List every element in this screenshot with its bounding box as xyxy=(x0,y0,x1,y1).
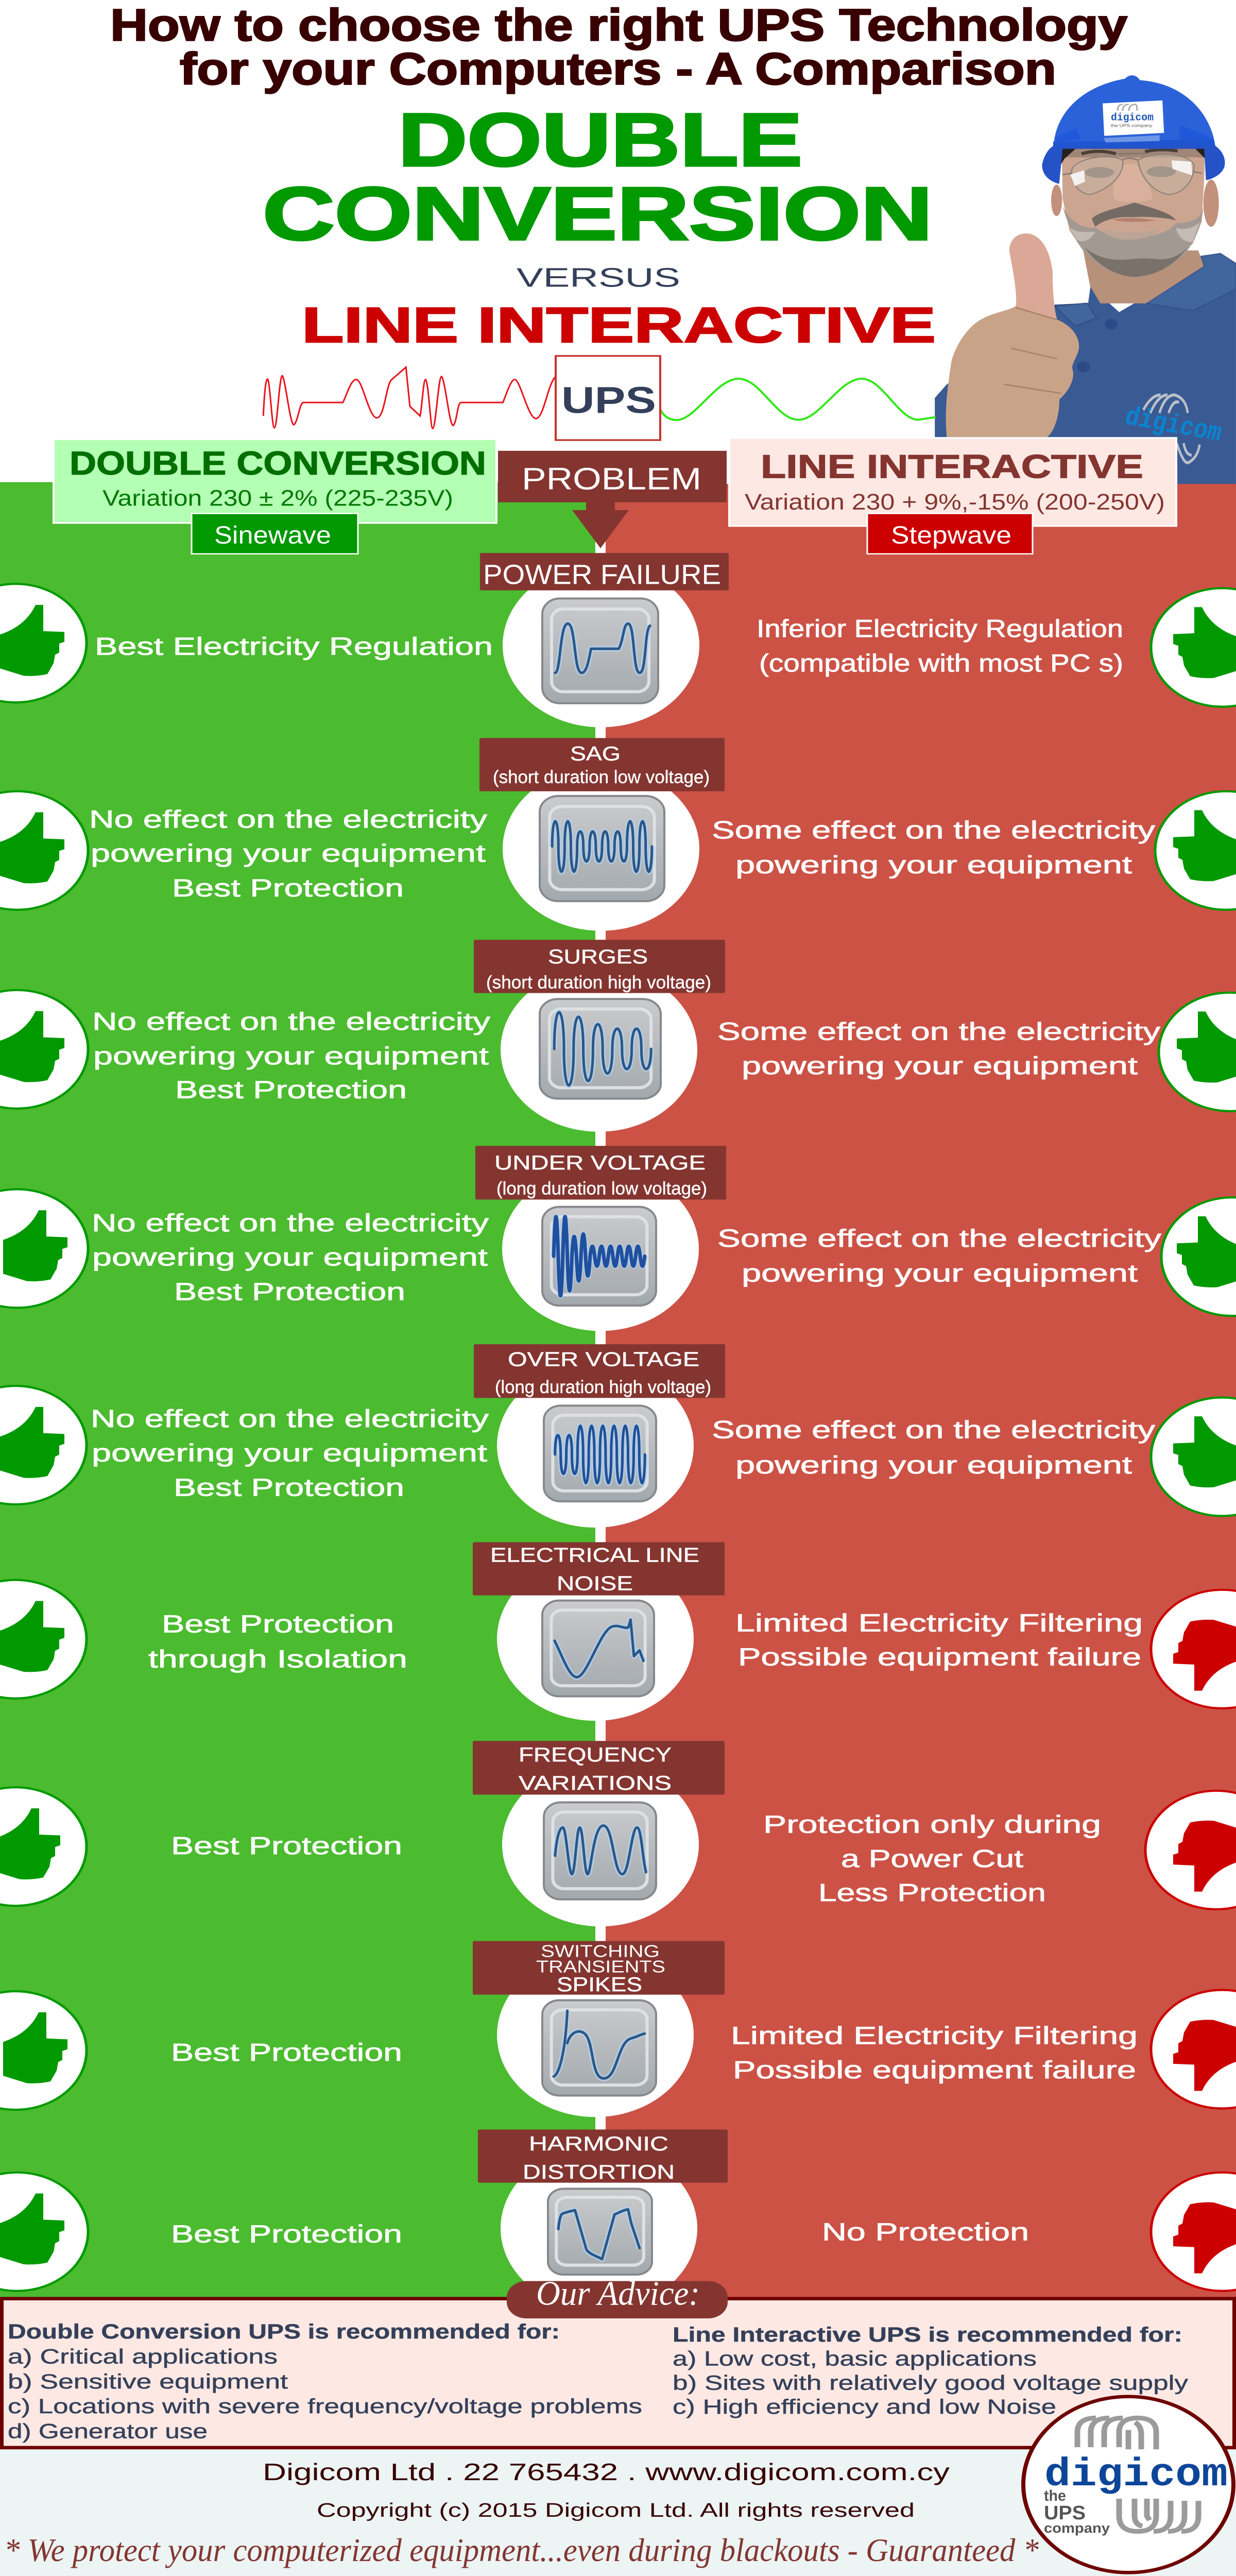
title: for your Computers - A Comparison xyxy=(180,44,1056,94)
logo tagline: company xyxy=(1044,2520,1110,2536)
label: sag xyxy=(479,738,725,791)
panel: red background xyxy=(606,484,1236,2298)
diagram: dirty power through UPS to clean sinewave xyxy=(263,356,936,440)
panel: double conversion header xyxy=(54,439,496,554)
title: How to choose the right UPS Technology xyxy=(110,0,1127,50)
label: sag: SAG xyxy=(570,742,621,765)
logo: digicom the UPS company xyxy=(1023,2397,1233,2572)
text: line interactive result xyxy=(717,1225,1161,1287)
icon: thumbs up right xyxy=(1161,1197,1236,1316)
icon: thumbs down right xyxy=(1151,2173,1236,2291)
center circle xyxy=(502,1762,699,1926)
photo: man in hard hat giving thumbs up: digicom xyxy=(1111,112,1154,124)
text: line interactive result: powering your equipment xyxy=(735,1451,1132,1479)
badge: sinewave xyxy=(192,514,358,554)
icon: thumbs up right xyxy=(1159,993,1236,1111)
text: double conversion result: Best Protection xyxy=(171,2221,402,2248)
icon: thumbs up left xyxy=(0,1386,87,1504)
text: line interactive result: Possible equipment failure xyxy=(738,1643,1141,1671)
problem heading xyxy=(498,451,727,502)
text: line interactive recommendations: b) Sites with relatively good voltage supply xyxy=(673,2371,1188,2394)
text: double conversion recommendations: Double Conversion UPS is recommended for: xyxy=(8,2320,560,2343)
text: contact line: Digicom Ltd . 22 765432 . www.digicom.com.cy xyxy=(263,2459,950,2485)
label: over voltage xyxy=(474,1344,725,1398)
label: harmonic distortion xyxy=(478,2129,728,2183)
label: surges: (short duration high voltage) xyxy=(486,973,711,992)
row: surges xyxy=(0,940,1236,1132)
center circle xyxy=(497,1953,694,2117)
text: line interactive result: powering your equipment xyxy=(742,1052,1138,1080)
text: double conversion recommendations: d) Generator use xyxy=(8,2420,208,2443)
text: double conversion result: powering your equipment xyxy=(93,1042,489,1070)
panel: line interactive header: Variation 230 + 9%,-15% (200-250V) xyxy=(745,490,1165,515)
photo: man in hard hat giving thumbs up xyxy=(935,75,1236,485)
text: line interactive result: (compatible with most PC s) xyxy=(759,650,1123,677)
label: electrical line noise: ELECTRICAL LINE xyxy=(490,1544,699,1567)
heading: line interactive: LINE INTERACTIVE xyxy=(302,297,936,353)
text: line interactive recommendations xyxy=(673,2324,1188,2418)
label: under voltage: (long duration low voltage) xyxy=(496,1179,707,1198)
text: double conversion result: Best Protection xyxy=(174,1278,405,1306)
label: harmonic distortion: DISTORTION xyxy=(523,2161,675,2183)
text: line interactive result xyxy=(735,1609,1143,1671)
text: double conversion result: Best Protection xyxy=(175,1076,407,1104)
text: line interactive result xyxy=(712,817,1155,879)
label: under voltage: UNDER VOLTAGE xyxy=(494,1152,706,1174)
text: double conversion result: Best Electricity Regulation xyxy=(95,633,493,660)
text: line interactive result: Some effect on the electricity xyxy=(712,817,1155,844)
arrow: problem down xyxy=(572,501,629,548)
text: double conversion result xyxy=(91,1405,489,1501)
text: line interactive result xyxy=(757,615,1123,677)
text: copyright: Copyright (c) 2015 Digicom Ltd. All rights reserved xyxy=(317,2499,915,2521)
label: surges: SURGES xyxy=(548,946,648,968)
text: double conversion result: No effect on the electricity xyxy=(91,1405,489,1433)
text: double conversion result: Best Protection xyxy=(162,1611,394,1638)
text: line interactive result: Protection only during xyxy=(763,1811,1101,1838)
text: line interactive result: powering your equipment xyxy=(742,1260,1138,1287)
label: electrical line noise: NOISE xyxy=(557,1572,633,1595)
panel: green background xyxy=(0,482,595,2298)
badge: stepwave xyxy=(867,514,1033,554)
panel: line interactive header: LINE INTERACTIVE xyxy=(761,448,1143,485)
heading: versus: VERSUS xyxy=(517,263,680,293)
icon: sag waveform xyxy=(540,796,664,901)
text: line interactive result xyxy=(731,2022,1138,2084)
label: harmonic distortion: HARMONIC xyxy=(529,2133,668,2155)
text: line interactive result: Possible equipment failure xyxy=(733,2057,1136,2084)
icon: thumbs up left xyxy=(0,1787,87,1906)
center connector line xyxy=(595,537,606,2284)
heading: double conversion: DOUBLE xyxy=(398,98,802,182)
label: switching transients spikes: TRANSIENTS xyxy=(536,1957,665,1976)
row: over voltage xyxy=(0,1344,1236,1528)
text: double conversion result xyxy=(92,1008,490,1104)
heading: double conversion xyxy=(263,98,933,256)
icon: thumbs up left xyxy=(0,2173,88,2291)
text: line interactive result: Inferior Electricity Regulation xyxy=(757,615,1123,643)
icon: thumbs down right xyxy=(1145,1791,1236,1909)
UPS box: UPS xyxy=(561,379,656,421)
text: double conversion result: powering your equipment xyxy=(92,1244,488,1272)
row: under voltage xyxy=(0,1146,1236,1331)
text: double conversion recommendations xyxy=(8,2320,642,2443)
label: surges xyxy=(474,940,725,993)
UPS box xyxy=(556,356,660,440)
text: line interactive result: powering your equipment xyxy=(735,851,1132,879)
text: double conversion result: No effect on the electricity xyxy=(92,1209,489,1237)
panel: footer background xyxy=(0,2449,1236,2576)
center circle xyxy=(501,968,697,1132)
label: switching transients spikes: SPIKES xyxy=(557,1974,642,1996)
logo arches bottom xyxy=(1119,2499,1198,2531)
logo tagline xyxy=(1044,2487,1110,2536)
panel: advice xyxy=(2,2299,1234,2448)
title xyxy=(110,0,1127,94)
icon: power failure waveform xyxy=(542,599,658,703)
problem heading: PROBLEM xyxy=(522,462,701,497)
icon: over voltage waveform xyxy=(544,1405,656,1501)
text: line interactive result xyxy=(763,1811,1101,1907)
center circle xyxy=(497,1364,694,1528)
label: switching transients spikes xyxy=(473,1941,725,1996)
row: sag xyxy=(0,738,1236,931)
text: double conversion result: Best Protection xyxy=(171,2039,402,2066)
icon: thumbs up left xyxy=(0,990,88,1109)
logo arches top xyxy=(1077,2418,1156,2449)
icon: thumbs up left xyxy=(0,1991,87,2110)
icon: surges waveform xyxy=(540,999,661,1098)
label: power failure: POWER FAILURE xyxy=(483,560,721,590)
text: line interactive recommendations: c) High efficiency and low Noise xyxy=(673,2396,1056,2418)
panel: double conversion header: DOUBLE CONVERSION xyxy=(70,445,486,482)
text: double conversion result: Best Protection xyxy=(171,1833,402,1860)
badge: stepwave: Stepwave xyxy=(891,521,1011,549)
icon: harmonic distortion waveform xyxy=(548,2189,652,2275)
icon: thumbs up right xyxy=(1155,791,1236,910)
text: line interactive recommendations: a) Low cost, basic applications xyxy=(673,2347,1037,2370)
icon: under voltage waveform xyxy=(542,1207,656,1306)
label: switching transients spikes: SWITCHING xyxy=(541,1941,660,1961)
text: line interactive result: Some effect on the electricity xyxy=(717,1225,1161,1252)
icon: thumbs up left xyxy=(0,791,88,910)
label: sag: (short duration low voltage) xyxy=(493,767,710,787)
text: line interactive result: Some effect on the electricity xyxy=(712,1416,1155,1444)
badge: our advice: Our Advice: xyxy=(536,2274,700,2312)
panel: line interactive header xyxy=(729,438,1176,554)
text: double conversion result xyxy=(92,1209,489,1306)
icon: thumbs down right xyxy=(1151,1590,1236,1708)
icon: thumbs up left xyxy=(0,1189,88,1308)
chart: clean output sinewave xyxy=(661,379,936,420)
heading: double conversion: CONVERSION xyxy=(263,172,933,256)
row: harmonic distortion xyxy=(0,2129,1236,2310)
text: line interactive result: Some effect on the electricity xyxy=(717,1018,1160,1045)
row: power failure xyxy=(0,553,1236,727)
text: line interactive recommendations: Line Interactive UPS is recommended for: xyxy=(673,2324,1182,2346)
center circle xyxy=(502,1167,699,1331)
label: over voltage: OVER VOLTAGE xyxy=(508,1348,699,1371)
icon: thumbs down right xyxy=(1151,1990,1236,2108)
label: over voltage: (long duration high voltage) xyxy=(495,1377,711,1397)
photo: man in hard hat giving thumbs up: the UPS company xyxy=(1111,123,1153,128)
text: double conversion result: powering your equipment xyxy=(91,840,486,867)
icon: thumbs up left xyxy=(0,584,87,702)
icon: line noise waveform xyxy=(542,1601,654,1696)
icon: thumbs up right xyxy=(1151,1397,1236,1516)
icon: thumbs up left xyxy=(0,1580,87,1699)
label: frequency variations xyxy=(473,1741,725,1794)
label: frequency variations: FREQUENCY xyxy=(519,1744,672,1766)
text: line interactive result xyxy=(712,1416,1155,1479)
text: double conversion result: No effect on the electricity xyxy=(92,1008,490,1036)
text: line interactive result: a Power Cut xyxy=(841,1845,1023,1873)
panel: double conversion header: Variation 230 ± 2% (225-235V) xyxy=(102,486,453,511)
label: electrical line noise xyxy=(473,1542,725,1596)
text: double conversion result: Best Protection xyxy=(174,1474,404,1501)
text: line interactive result xyxy=(717,1018,1160,1080)
icon: switching transient waveform xyxy=(542,2000,656,2096)
label: under voltage xyxy=(475,1146,726,1199)
text: line interactive result: No Protection xyxy=(822,2218,1029,2246)
chart: distorted input waveform xyxy=(263,367,556,429)
text: double conversion result xyxy=(148,1611,407,1673)
text: double conversion recommendations: b) Sensitive equipment xyxy=(8,2370,288,2393)
center circle xyxy=(501,2146,697,2310)
text: double conversion result: No effect on the electricity xyxy=(89,806,487,834)
text: double conversion recommendations: c) Locations with severe frequency/voltage problems xyxy=(8,2395,642,2418)
logo tagline: the xyxy=(1044,2487,1066,2504)
center circle xyxy=(503,563,699,727)
text: line interactive result: Limited Electricity Filtering xyxy=(731,2022,1138,2049)
label: frequency variations: VARIATIONS xyxy=(519,1772,672,1794)
text: double conversion result xyxy=(89,806,487,902)
center circle xyxy=(503,767,699,931)
icon: thumbs up right xyxy=(1151,588,1236,707)
text: double conversion result: Best Protection xyxy=(172,874,404,902)
icon: frequency variation waveform xyxy=(544,1802,656,1900)
text: double conversion recommendations: a) Critical applications xyxy=(8,2345,278,2368)
text: line interactive result: Less Protection xyxy=(818,1879,1046,1907)
text: line interactive result: Limited Electricity Filtering xyxy=(735,1609,1143,1637)
row: switching transients spikes xyxy=(0,1941,1236,2117)
badge: sinewave: Sinewave xyxy=(214,521,331,549)
text: double conversion result: through Isolation xyxy=(148,1646,407,1673)
logo tagline: UPS xyxy=(1044,2502,1086,2523)
row: electrical line noise xyxy=(0,1542,1236,1721)
center circle xyxy=(497,1557,694,1721)
row: frequency variations xyxy=(0,1741,1236,1926)
text: double conversion result: powering your equipment xyxy=(92,1439,487,1467)
